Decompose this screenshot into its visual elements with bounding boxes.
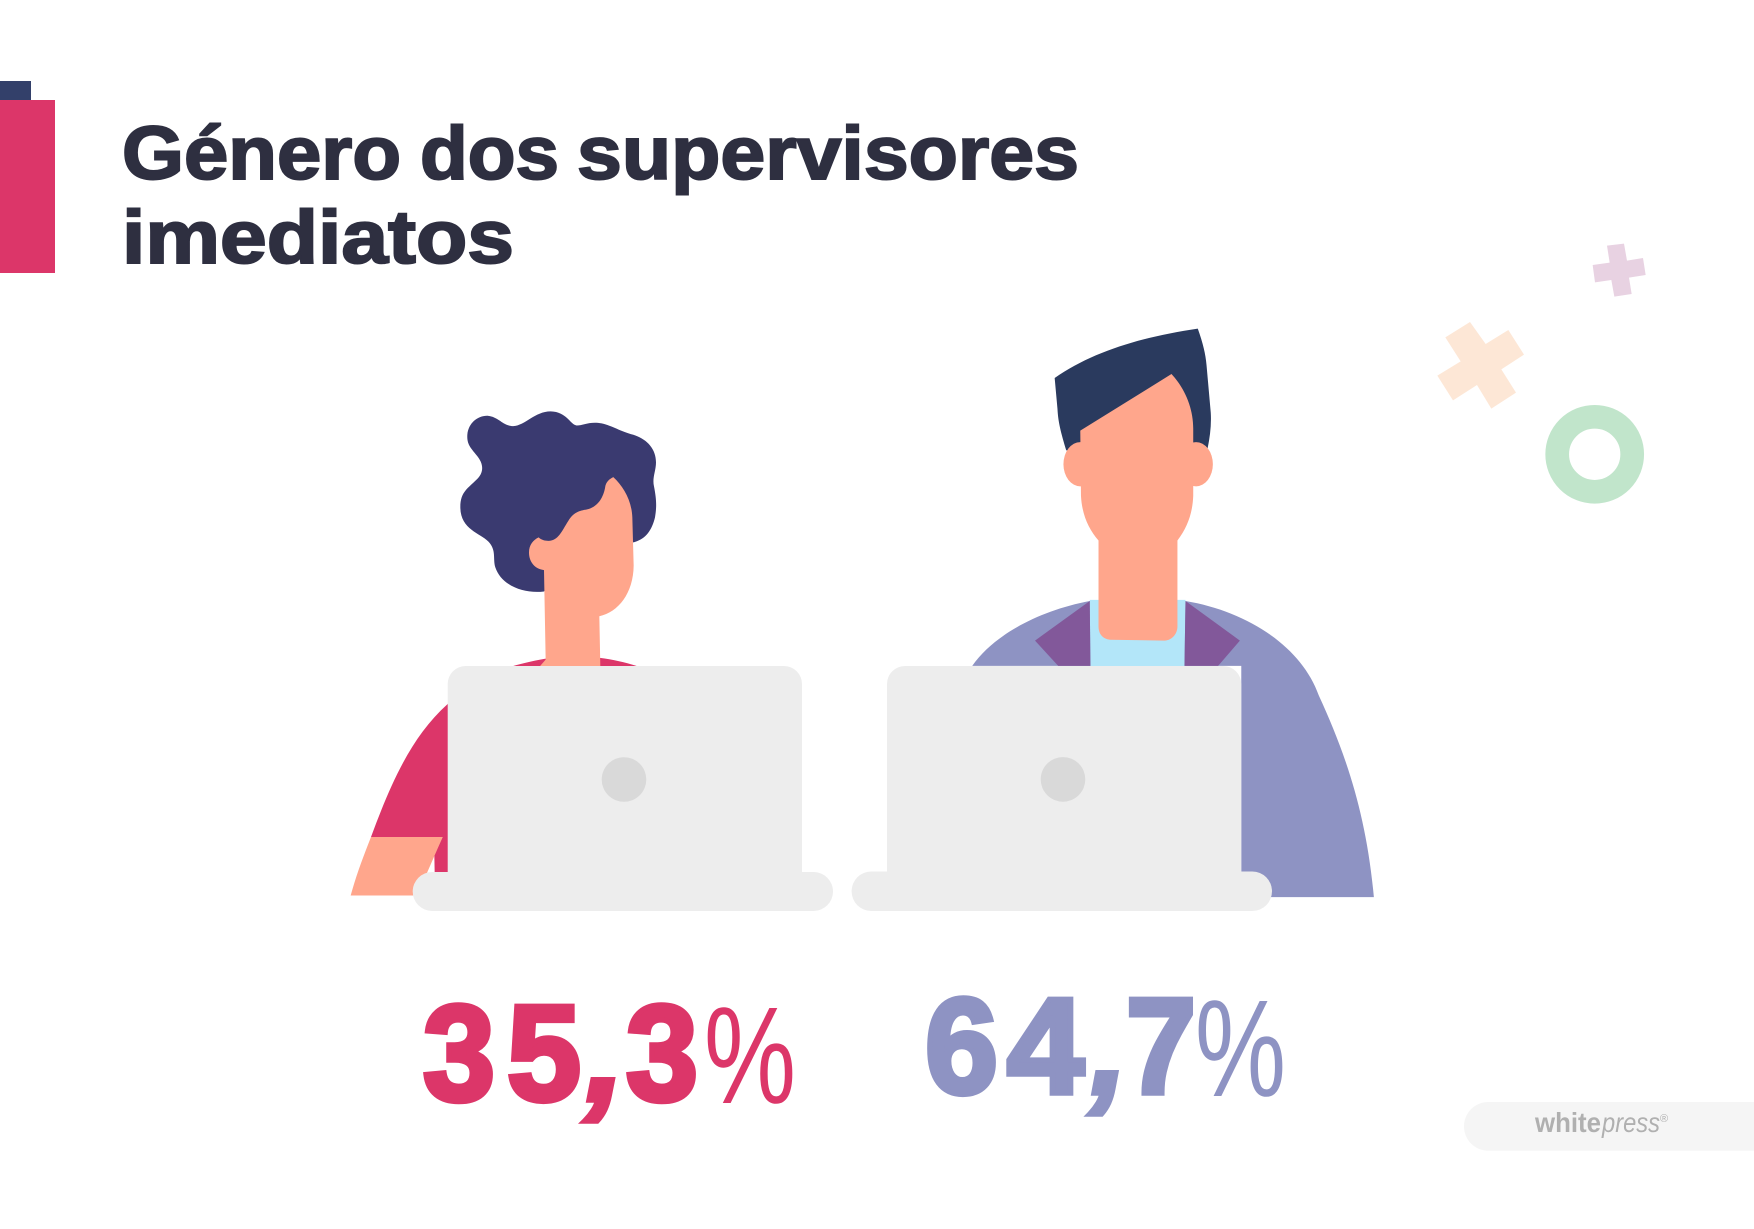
laptop base — [852, 872, 1272, 911]
badge pill — [1464, 1102, 1754, 1151]
pink top — [371, 658, 638, 872]
right lapel — [1184, 601, 1240, 666]
laptop logo — [602, 757, 646, 802]
laptop screen — [887, 666, 1241, 891]
icon: peach cross — [1437, 322, 1524, 409]
statistic: 35,3%: , — [584, 977, 624, 1129]
icon: mauve cross — [1593, 244, 1646, 297]
figure: man at laptop — [852, 329, 1374, 911]
face and neck — [1080, 374, 1193, 641]
figure: woman at laptop — [351, 411, 833, 911]
statistic: 35,3%: 5 — [507, 977, 581, 1129]
statistic: 35,3%: % — [704, 979, 796, 1133]
statistic: 64,7%: , — [1089, 970, 1127, 1122]
statistic: 64,7% — [925, 970, 1286, 1126]
laptop base — [413, 872, 833, 911]
hair — [1055, 329, 1211, 450]
brand name — [1534, 1107, 1668, 1138]
statistic: 64,7%: 7 — [1126, 970, 1196, 1122]
right ear — [1179, 442, 1213, 486]
face and neck — [529, 477, 634, 667]
man illustration — [972, 329, 1374, 897]
hair — [460, 411, 656, 592]
decorative corner block: navy and pink bars — [0, 81, 55, 273]
logo badge: whitepress — [1464, 1102, 1754, 1151]
laptop screen — [448, 666, 802, 891]
title: imediatos — [122, 195, 514, 279]
statistic: 35,3%: 3 — [626, 977, 698, 1129]
left ear — [1063, 442, 1097, 486]
title: dos — [420, 111, 559, 195]
shirt — [1090, 600, 1186, 668]
statistic: 64,7%: 4 — [1007, 970, 1084, 1122]
statistic: 35,3% — [423, 977, 796, 1133]
title: supervisores — [577, 111, 1079, 195]
statistic: 64,7%: % — [1195, 972, 1286, 1126]
brand name: ® — [1660, 1113, 1668, 1125]
jacket — [972, 601, 1374, 897]
statistic: 35,3%: 3 — [423, 977, 495, 1129]
laptop — [852, 666, 1272, 911]
icon: green ring — [1557, 417, 1632, 492]
left lapel — [1035, 601, 1090, 666]
statistic: 64,7%: 6 — [925, 970, 998, 1122]
title: Género — [122, 111, 401, 195]
title — [122, 111, 1079, 279]
arm — [351, 837, 443, 896]
laptop — [413, 666, 833, 911]
laptop logo — [1041, 757, 1085, 802]
brand name: press — [1601, 1107, 1660, 1138]
woman illustration — [351, 411, 656, 896]
brand name: white — [1534, 1107, 1601, 1138]
